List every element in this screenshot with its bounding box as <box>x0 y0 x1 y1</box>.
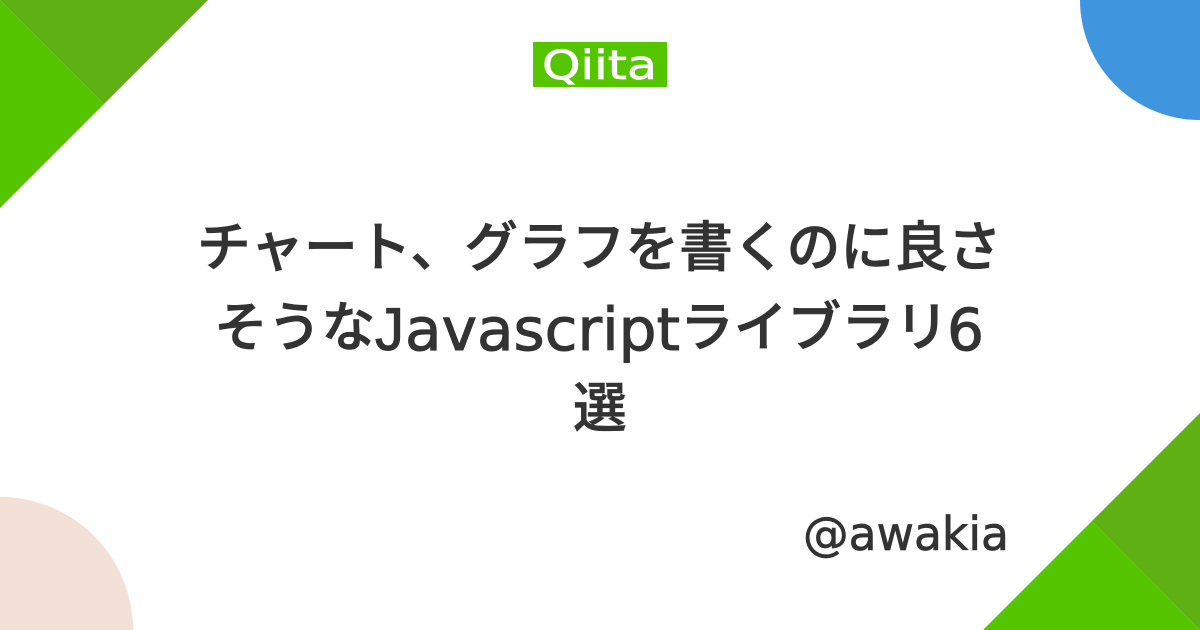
title: avascript <box>405 295 680 364</box>
author handle: @awakia <box>803 507 1009 561</box>
title: 選 <box>573 366 627 443</box>
title: 6 <box>947 296 984 364</box>
title: J <box>375 296 404 363</box>
title: ライブラリ <box>680 285 949 362</box>
Qiita logo badge <box>533 42 667 87</box>
title: そうな <box>214 285 375 362</box>
title: チャート、グラフを書くのに良さ <box>197 205 1002 282</box>
